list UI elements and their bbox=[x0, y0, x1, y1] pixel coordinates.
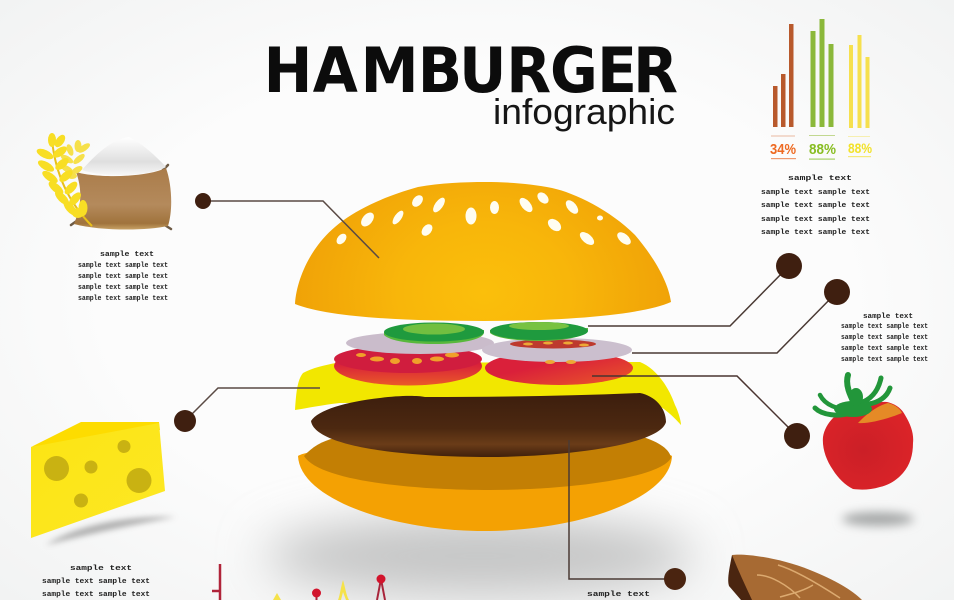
tomato highlight bbox=[858, 403, 902, 423]
green label: 88% bbox=[809, 141, 836, 158]
sesame seeds bbox=[335, 190, 633, 247]
connector: meat bbox=[569, 440, 686, 590]
green bars bbox=[810, 19, 834, 127]
connector: onion bbox=[632, 279, 850, 353]
steak top bbox=[732, 555, 862, 600]
text block: tomato: sample text sample text bbox=[841, 323, 928, 331]
text block: tomato bbox=[841, 313, 928, 364]
connector: cheese bbox=[174, 388, 320, 432]
burger ground shadow bbox=[265, 516, 695, 596]
cheese holes bbox=[44, 440, 152, 508]
text block: tomato: sample text sample text bbox=[841, 356, 928, 364]
text block: chart: sample text bbox=[788, 175, 852, 183]
icon: steak bbox=[728, 555, 862, 600]
yellow label bbox=[848, 136, 872, 157]
icon: tomato bbox=[815, 375, 914, 526]
right pickle bbox=[490, 322, 588, 341]
orange bars bbox=[773, 24, 794, 127]
text block: flour: sample text sample text bbox=[78, 262, 168, 270]
right onion ring bbox=[482, 338, 632, 364]
dot: tomato bbox=[784, 423, 810, 449]
tomato stem bbox=[815, 375, 890, 417]
steak edge bbox=[728, 555, 770, 600]
text block: tomato: sample text sample text bbox=[841, 334, 928, 342]
text block: flour: sample text sample text bbox=[78, 273, 168, 281]
left onion ring bbox=[346, 332, 494, 354]
flour bbox=[82, 137, 166, 175]
text block: cheese: sample text sample text bbox=[42, 591, 150, 599]
green label bbox=[809, 135, 836, 160]
text block: cheese: sample text bbox=[70, 565, 132, 573]
cheese top face bbox=[31, 422, 160, 447]
dot: onion bbox=[824, 279, 850, 305]
text block: cheese bbox=[42, 565, 150, 599]
top bun bbox=[295, 182, 671, 321]
icon: flour sack and wheat bbox=[35, 133, 171, 230]
yellow label: 88% bbox=[848, 140, 872, 156]
red marker two bbox=[376, 574, 386, 600]
connector: tomato bbox=[592, 376, 810, 449]
wheat ear small bbox=[59, 140, 91, 179]
red axis bbox=[212, 564, 220, 600]
text block: bottom: sample text bbox=[587, 591, 650, 599]
orange label bbox=[770, 136, 796, 159]
bottom line chart bbox=[212, 564, 386, 600]
text block: flour: sample text sample text bbox=[78, 284, 168, 292]
text block: tomato: sample text sample text bbox=[841, 345, 928, 353]
yellow spike two bbox=[338, 580, 349, 600]
left tomato slice bbox=[334, 345, 482, 386]
text block: flour: sample text sample text bbox=[78, 295, 168, 303]
cheese slice bbox=[295, 362, 681, 425]
yellow spike one bbox=[273, 593, 281, 600]
onion inner tomato bbox=[510, 340, 596, 348]
text block: flour bbox=[78, 251, 168, 303]
dot: bun bbox=[195, 193, 211, 209]
text block: chart: sample text sample text bbox=[761, 216, 870, 224]
text block: cheese: sample text sample text bbox=[42, 578, 150, 586]
right tomato slice bbox=[485, 351, 633, 385]
connector: bun bbox=[195, 193, 379, 258]
text block: chart: sample text sample text bbox=[761, 189, 870, 197]
dot: pickle bbox=[776, 253, 802, 279]
text block: chart: sample text sample text bbox=[761, 229, 870, 237]
wheat ear large bbox=[35, 133, 92, 226]
tomato body bbox=[823, 402, 913, 490]
stem centre bbox=[834, 388, 872, 417]
patty bbox=[311, 393, 666, 457]
text block: tomato: sample text bbox=[863, 313, 913, 321]
subtitle: infographic bbox=[493, 91, 675, 132]
yellow bars bbox=[849, 35, 870, 128]
cheese shadow bbox=[46, 517, 176, 545]
sack bbox=[74, 168, 171, 230]
orange label: 34% bbox=[770, 141, 796, 158]
text block: chart bbox=[761, 175, 870, 237]
inner seeds bbox=[523, 342, 589, 364]
bottom bun bbox=[298, 436, 672, 531]
cheese front face bbox=[31, 423, 165, 538]
dot: meat bbox=[664, 568, 686, 590]
hamburger bbox=[295, 182, 681, 531]
text block: chart: sample text sample text bbox=[761, 202, 870, 210]
text block: flour: sample text bbox=[100, 251, 154, 259]
bar chart: percentages bbox=[770, 19, 872, 160]
connector: pickle bbox=[588, 253, 802, 326]
dot: cheese bbox=[174, 410, 196, 432]
steak grill marks bbox=[757, 565, 840, 598]
sack corners bbox=[71, 165, 171, 229]
tomato seeds bbox=[356, 352, 459, 364]
tomato shadow bbox=[842, 512, 914, 526]
red marker one bbox=[312, 588, 321, 600]
left pickle bbox=[384, 322, 484, 344]
title: HAMBURGER bbox=[264, 35, 678, 107]
icon: cheese wedge bbox=[31, 422, 176, 545]
